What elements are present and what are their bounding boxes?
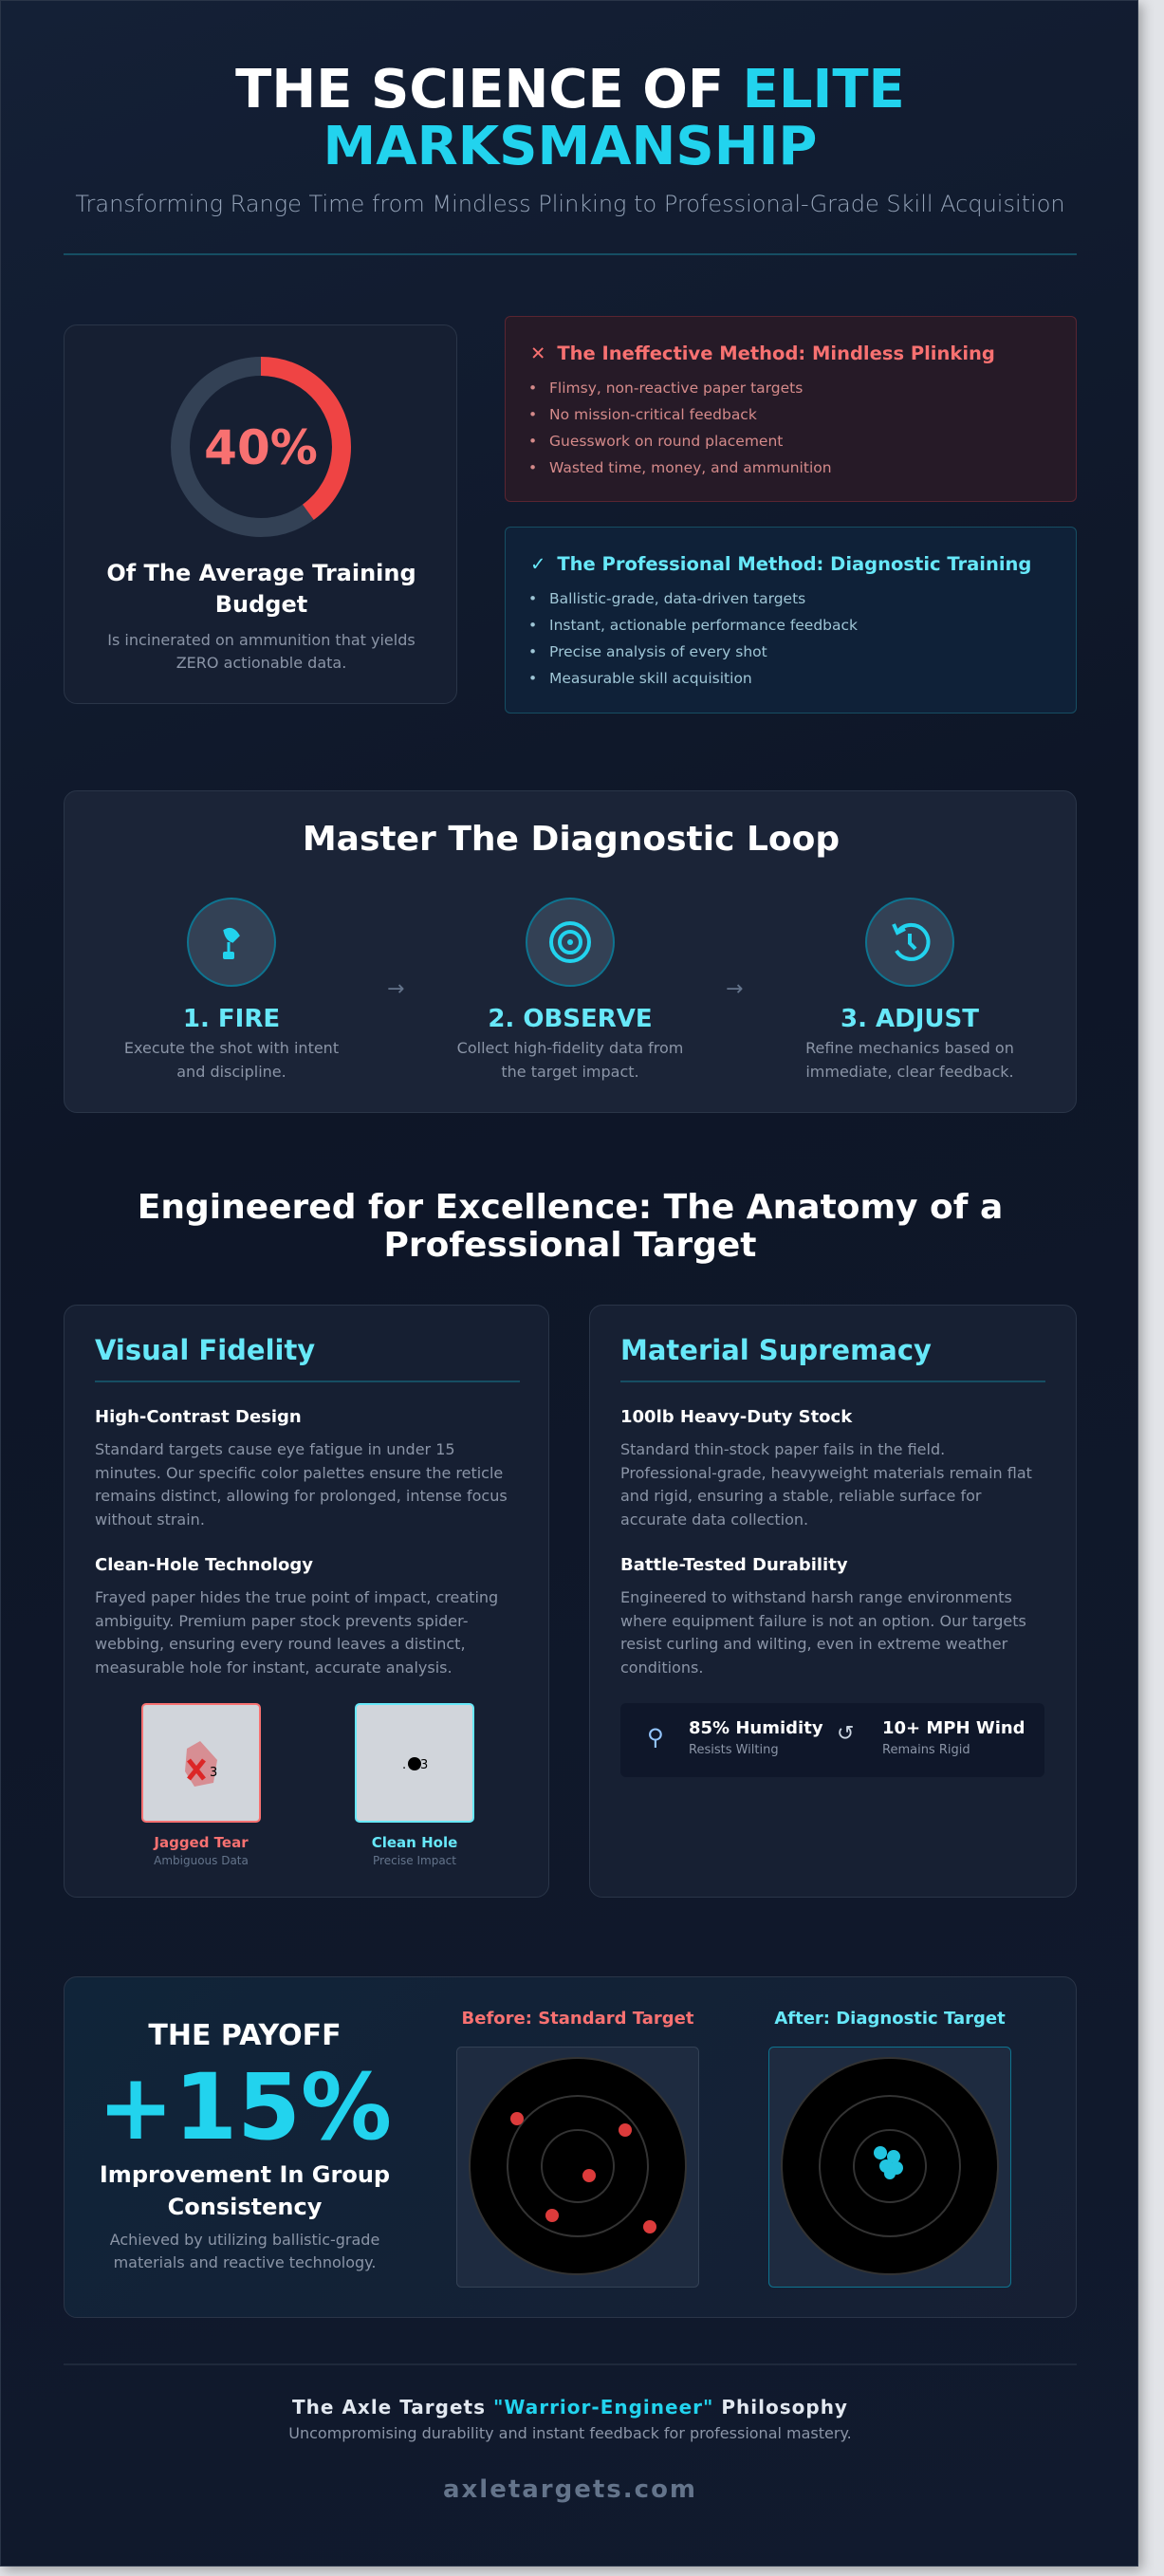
- heading: ✕ The Ineffective Method: Mindless Plinking: [530, 343, 995, 364]
- text: Is incinerated on ammunition that yields: [107, 631, 416, 649]
- step: adjust: Refine mechanics based on: [805, 1039, 1014, 1057]
- panel: payoff: Improvement In Group: [100, 2161, 390, 2188]
- arrow: →: [387, 977, 404, 1001]
- stats box: 10+ MPH Wind: [882, 1718, 1025, 1738]
- step: observe: Collect high-fidelity data from: [457, 1039, 683, 1057]
- list: Ballistic-grade, data-driven targets: [549, 590, 805, 607]
- list: Wasted time, money, and ammunition: [549, 459, 832, 476]
- section heading: Professional Target: [383, 1226, 757, 1265]
- panel: visual fidelity: Frayed paper hides the true point of impact, creating ambiguity. Premium paper stock prevents spider-webbing, ensuring every round leaves a distinct, measurable hole for instant, accurate analysis.: [95, 1588, 498, 1676]
- icon: jagged tear: Ambiguous Data: [154, 1854, 249, 1867]
- panel: material supremacy: Material Supremacy: [620, 1334, 932, 1366]
- stats box: Remains Rigid: [882, 1743, 970, 1757]
- panel: payoff: +15%: [98, 2054, 392, 2160]
- icon: jagged tear: 3: [210, 1766, 217, 1780]
- icon: clean hole: .: [402, 1758, 406, 1772]
- step: adjust: immediate, clear feedback.: [805, 1063, 1014, 1081]
- donut chart: 40%: [204, 420, 318, 475]
- title: [235, 59, 905, 177]
- footer philosophy: The Axle Targets "Warrior-Engineer" Philosophy: [292, 2396, 848, 2418]
- step: fire: [124, 898, 339, 1081]
- panel: visual fidelity: High-Contrast Design: [95, 1407, 302, 1427]
- panel: visual fidelity: Clean-Hole Technology: [95, 1555, 313, 1575]
- list: Precise analysis of every shot: [549, 643, 767, 660]
- icon: fire: [187, 898, 276, 987]
- icon: clean hole: 3: [420, 1758, 428, 1772]
- panel: payoff: materials and reactive technology.: [114, 2253, 376, 2271]
- stats box: 85% Humidity: [689, 1718, 823, 1738]
- list: [530, 380, 832, 476]
- step: fire: 1. FIRE: [183, 1005, 280, 1033]
- panel: visual fidelity: [64, 1305, 549, 1898]
- step: observe: 2. OBSERVE: [488, 1005, 653, 1033]
- list: No mission-critical feedback: [549, 406, 757, 423]
- panel: ineffective method: [505, 316, 1077, 502]
- icon: target: [526, 898, 615, 987]
- stats box: Resists Wilting: [689, 1743, 779, 1757]
- icon: jagged tear: [141, 1703, 261, 1867]
- step: fire: and discipline.: [176, 1063, 286, 1081]
- after target: After: Diagnostic Target: [774, 2009, 1006, 2029]
- list: Flimsy, non-reactive paper targets: [549, 380, 803, 397]
- subtitle: Transforming Range Time from Mindless Plinking to Professional-Grade Skill Acquisition: [75, 191, 1065, 217]
- panel: professional method: [505, 527, 1077, 713]
- step: fire: Execute the shot with intent: [124, 1039, 339, 1057]
- step: observe: [457, 898, 683, 1081]
- panel: material supremacy: Standard thin-stock paper fails in the field. Professional-grade, heavyweight materials remain flat and rigid, ensuring a stable, reliable surface for accurate data collection.: [620, 1440, 1032, 1528]
- section heading: [138, 1188, 1003, 1265]
- heading: [106, 560, 416, 618]
- before target: Before: Standard Target: [462, 2009, 693, 2029]
- text: ZERO actionable data.: [176, 654, 346, 672]
- panel: 40% budget: [64, 324, 457, 704]
- icon: clean hole: Clean Hole: [372, 1834, 457, 1851]
- panel: material supremacy: [589, 1305, 1077, 1898]
- panel: payoff: [64, 1976, 1077, 2318]
- title: THE SCIENCE OF ELITE: [235, 59, 905, 120]
- panel: payoff: Achieved by utilizing ballistic-grade: [110, 2231, 379, 2249]
- panel: diagnostic loop: [64, 790, 1077, 1113]
- panel: payoff: Consistency: [168, 2194, 322, 2220]
- section heading: Engineered for Excellence: The Anatomy of a: [138, 1188, 1003, 1227]
- panel: material supremacy: Battle-Tested Durability: [620, 1555, 848, 1575]
- icon: wind: ↺: [837, 1722, 854, 1746]
- icon: history: [865, 898, 954, 987]
- icon: clean hole: Precise Impact: [373, 1854, 456, 1867]
- icon: jagged tear: Jagged Tear: [154, 1834, 249, 1851]
- list: Instant, actionable performance feedback: [549, 617, 858, 634]
- list: Measurable skill acquisition: [549, 670, 752, 687]
- step: adjust: 3. ADJUST: [841, 1005, 979, 1033]
- heading: Master The Diagnostic Loop: [303, 820, 840, 859]
- step: adjust: [805, 898, 1014, 1081]
- heading: Budget: [215, 591, 307, 618]
- text: Uncompromising durability and instant feedback for professional mastery.: [288, 2424, 852, 2442]
- panel: payoff: THE PAYOFF: [148, 2019, 342, 2052]
- text: [107, 631, 416, 672]
- panel: material supremacy: Engineered to withstand harsh range environments where equipment failure is not an option. Our targets resist curling and wilting, even in extreme weather conditions.: [620, 1588, 1026, 1676]
- icon: clean hole: [355, 1703, 474, 1867]
- donut chart: [171, 357, 351, 537]
- icon: humidity: ⚲: [647, 1724, 664, 1751]
- step: observe: the target impact.: [501, 1063, 639, 1081]
- panel: visual fidelity: Visual Fidelity: [95, 1334, 315, 1366]
- list: Guesswork on round placement: [549, 433, 783, 450]
- after target: [768, 2009, 1011, 2288]
- list: [530, 590, 858, 687]
- before target: [456, 2009, 699, 2288]
- arrow: →: [726, 977, 743, 1001]
- footer url: axletargets.com: [443, 2475, 697, 2504]
- panel: material supremacy: 100lb Heavy-Duty Stock: [620, 1407, 852, 1427]
- panel: visual fidelity: Standard targets cause eye fatigue in under 15 minutes. Our specific color palettes ensure the reticle remains distinct, allowing for prolonged, intense focus without strain.: [95, 1440, 508, 1528]
- title: MARKSMANSHIP: [323, 116, 817, 177]
- stats box: [620, 1703, 1044, 1777]
- heading: ✓ The Professional Method: Diagnostic Training: [530, 553, 1031, 575]
- heading: Of The Average Training: [106, 560, 416, 586]
